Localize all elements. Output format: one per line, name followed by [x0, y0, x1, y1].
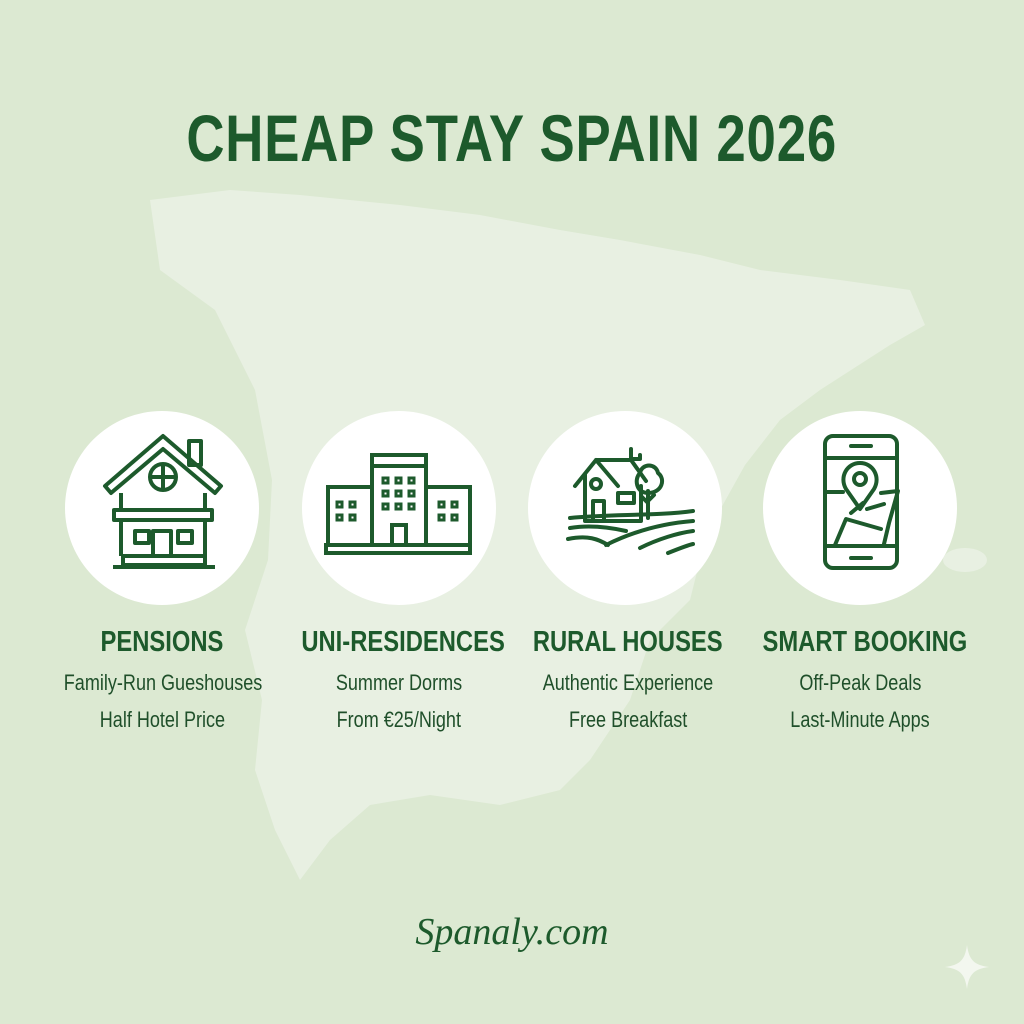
column: rural houses: Free Breakfast — [569, 707, 687, 732]
column: smart booking: Off-Peak Deals — [799, 670, 921, 695]
title: CHEAP STAY SPAIN 2026 — [187, 101, 837, 175]
icon circle: pensions house — [65, 411, 259, 605]
column: uni-residences: From €25/Night — [337, 707, 461, 732]
column: rural houses: RURAL HOUSES — [533, 626, 723, 658]
icon circle: rural house — [528, 411, 722, 605]
column: smart booking: Last-Minute Apps — [790, 707, 930, 732]
column: uni-residences: Summer Dorms — [336, 670, 462, 695]
column: rural houses: Authentic Experience — [543, 670, 713, 695]
column: pensions — [64, 626, 262, 732]
icon: sparkle — [946, 946, 988, 988]
column: pensions: Family-Run Gueshouses — [64, 670, 262, 695]
column: pensions: Half Hotel Price — [99, 707, 225, 732]
column: uni-residences: UNI-RESIDENCES — [301, 626, 505, 658]
footer brand: Spanaly.com — [415, 911, 609, 953]
column: pensions: PENSIONS — [101, 626, 223, 658]
column: smart booking: SMART BOOKING — [762, 626, 967, 658]
column: smart booking — [762, 626, 967, 732]
column: rural houses — [533, 626, 723, 732]
column: uni-residences — [301, 626, 505, 732]
icon circle: smart booking phone — [763, 411, 957, 605]
icon circle: uni residences — [302, 411, 496, 605]
